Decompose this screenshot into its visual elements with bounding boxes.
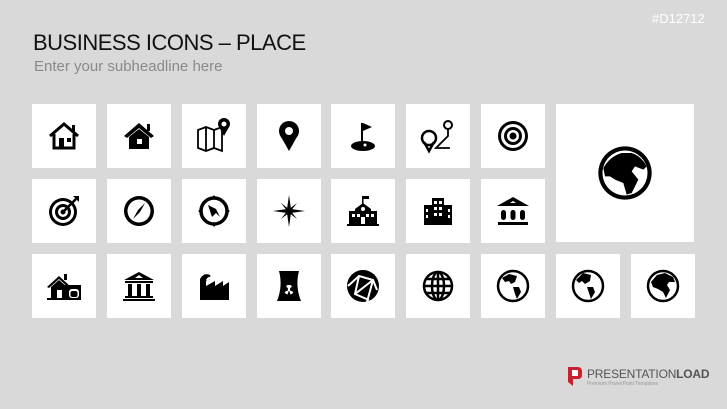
icon: network globe — [331, 254, 395, 318]
logo text: PRESENTATIONLOAD — [587, 367, 709, 381]
code label: #D12712 — [652, 11, 705, 26]
icon: compass — [107, 179, 171, 243]
icon: globe americas 2 — [556, 254, 620, 318]
icon: globe europe — [631, 254, 695, 318]
icon: compass 2 — [182, 179, 246, 243]
icon: route pins — [406, 104, 470, 168]
icon: map with pin — [182, 104, 246, 168]
logo: PresentationLoad — [568, 367, 709, 387]
icon: target with arrow — [32, 179, 96, 243]
title: BUSINESS ICONS – PLACE — [33, 30, 306, 55]
logo icon — [568, 367, 582, 386]
logo: PresentationLoad: Premium PowerPoint Templates — [587, 381, 658, 387]
icon: house with garage — [32, 254, 96, 318]
icon: location pin — [257, 104, 321, 168]
icon: nuclear plant — [257, 254, 321, 318]
icon: office buildings — [406, 179, 470, 243]
icon: house outline — [32, 104, 96, 168]
big tile: globe africa/europe — [556, 104, 694, 242]
icon: globe americas — [481, 254, 545, 318]
subheadline: Enter your subheadline here — [34, 58, 222, 75]
icon: golf — [331, 104, 395, 168]
icon: star compass — [257, 179, 321, 243]
icon: school — [331, 179, 395, 243]
icon: bank — [481, 179, 545, 243]
icon: house solid — [107, 104, 171, 168]
icon: grid globe — [406, 254, 470, 318]
icon: factory — [182, 254, 246, 318]
icon: target — [481, 104, 545, 168]
icon: museum — [107, 254, 171, 318]
